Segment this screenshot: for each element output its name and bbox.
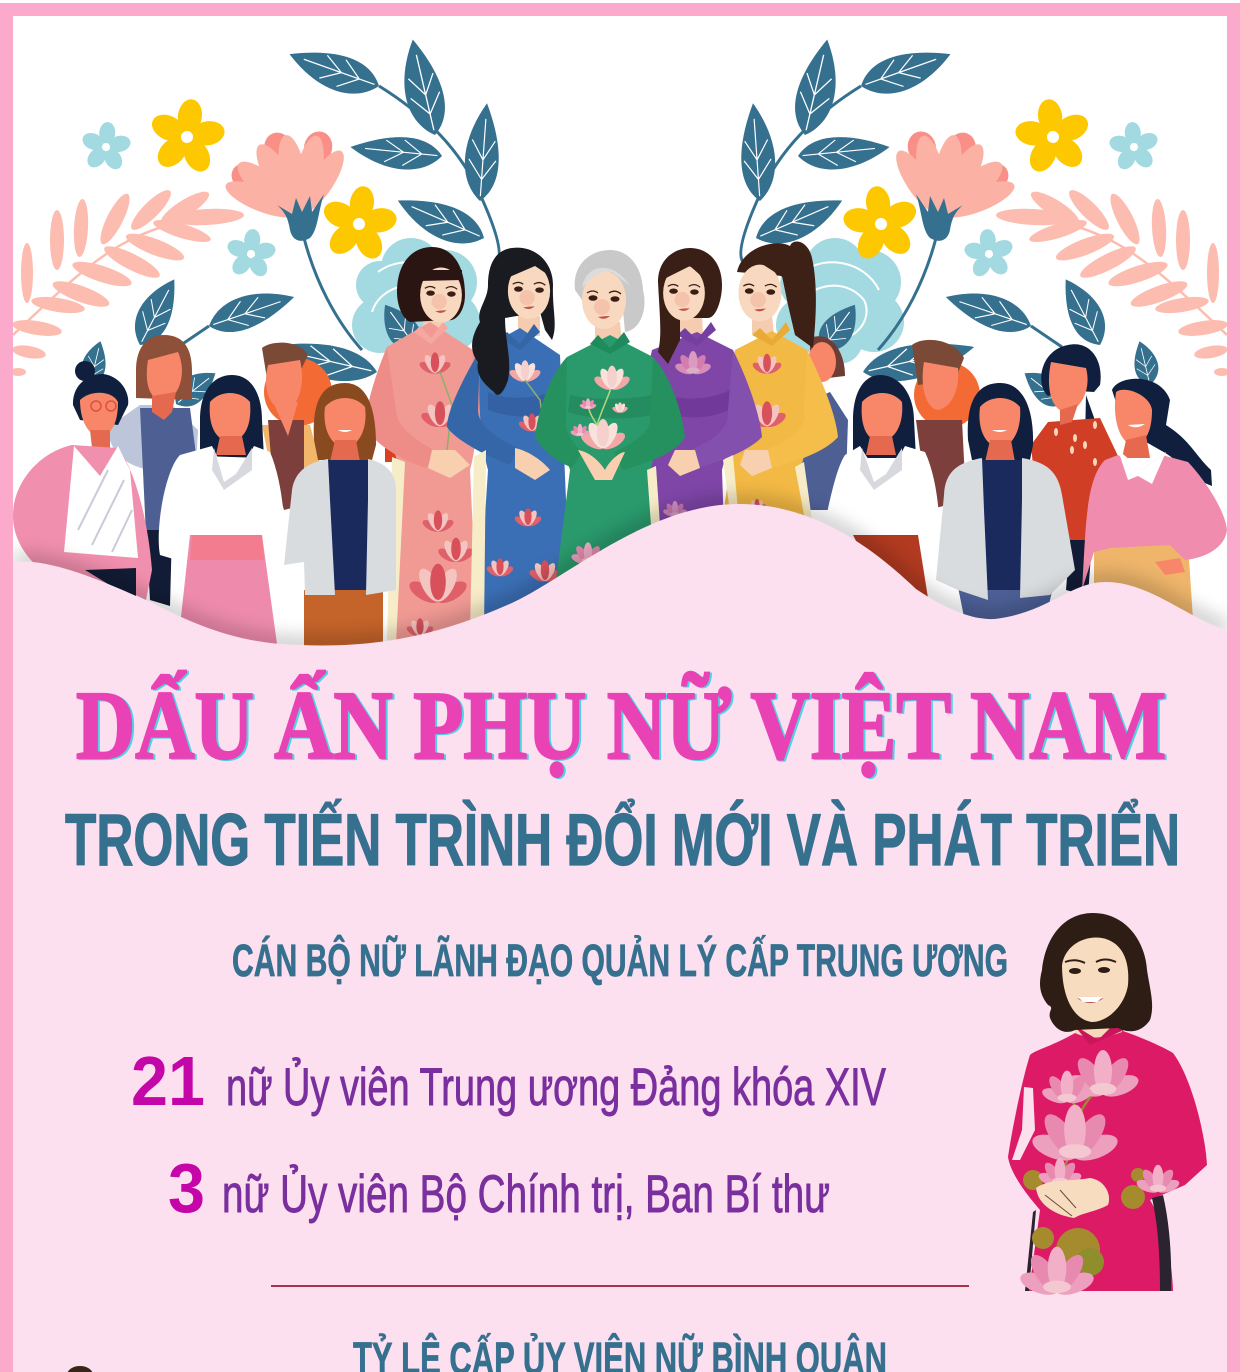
- face: [1062, 937, 1128, 1022]
- woman: pink ao dai: [365, 247, 492, 644]
- woman: red sweater: [1031, 344, 1122, 596]
- five women in ao dai: [365, 242, 838, 644]
- woman: yellow ao dai: [722, 242, 838, 520]
- front row of women: [13, 361, 1227, 648]
- stat number 3: 3: [168, 1149, 205, 1227]
- woman: blue ao dai: [447, 248, 566, 630]
- woman: long brown hair, grey jacket: [284, 383, 396, 648]
- floral decoration: right: [737, 36, 1230, 414]
- woman: blue top, left: [107, 335, 198, 606]
- stat number 21: 21: [131, 1042, 205, 1120]
- woman: black hair, grey jacket: [936, 383, 1075, 622]
- rose: right: [776, 238, 904, 364]
- woman: brown V top, left: [262, 343, 412, 510]
- portrait: woman in magenta ao dai: [1008, 913, 1207, 1299]
- woman: purple ao dai: [644, 248, 762, 530]
- back row of women: [107, 335, 1122, 606]
- woman: behind yellow dress: [794, 336, 848, 510]
- pink content panel with wavy top edge: [13, 504, 1227, 1372]
- woman: brown V top, right: [912, 340, 980, 510]
- stat label 3: nữ Ủy viên Bộ Chính trị, Ban Bí thư: [222, 1164, 830, 1224]
- small portrait head at bottom edge: [67, 1366, 93, 1372]
- wave shadow: [13, 504, 1227, 646]
- woman: white blouse, red skirt: [820, 375, 940, 598]
- divider rule: [271, 1285, 969, 1287]
- lotus embroidery: [1017, 1050, 1181, 1299]
- stat label 21: nữ Ủy viên Trung ương Đảng khóa XIV: [226, 1057, 886, 1117]
- clasped hands: [1036, 1178, 1109, 1218]
- woman: black hair, white blouse: [159, 375, 285, 644]
- woman: bun and glasses, pink cardigan: [13, 361, 152, 600]
- woman: green ao dai: [535, 250, 685, 580]
- hair: [1040, 913, 1152, 1032]
- floral decoration: left: [10, 36, 503, 414]
- rose: left: [352, 238, 480, 364]
- woman: wavy hair, pink sweater: [1082, 379, 1227, 619]
